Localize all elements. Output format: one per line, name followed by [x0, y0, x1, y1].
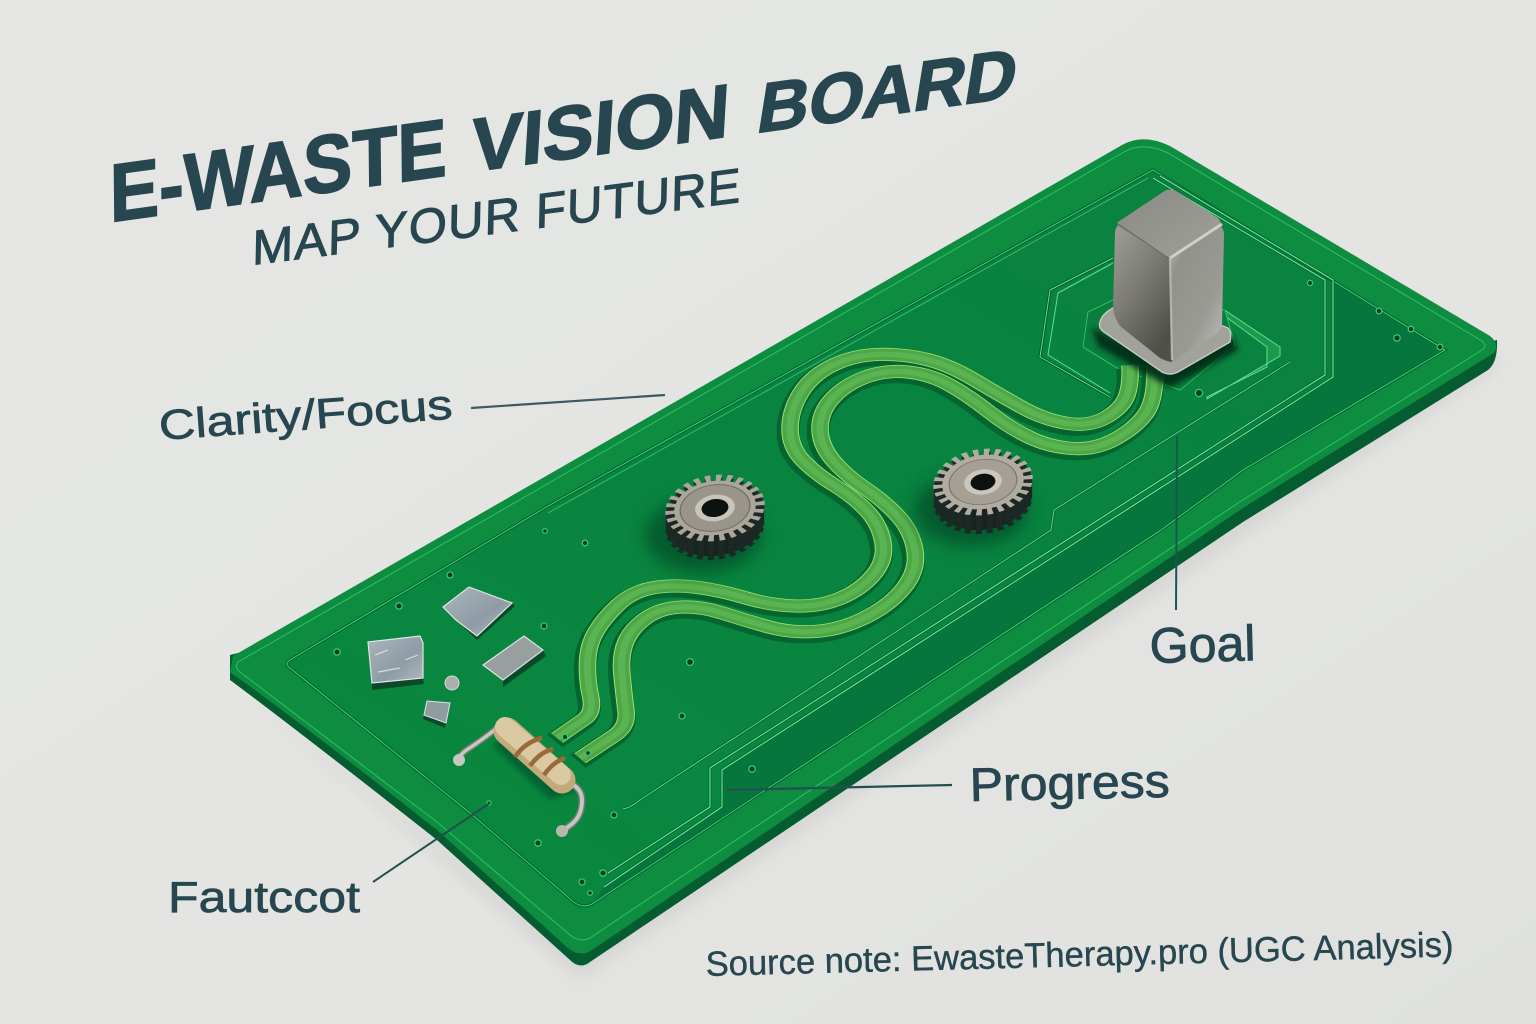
chip dot: [445, 676, 459, 690]
resistor leads: [458, 728, 497, 760]
title: BOARD: [752, 34, 1023, 149]
dark lower-right band: [592, 280, 1445, 904]
panel: circuit board: [230, 139, 1500, 980]
callout: Goal: Goal: [1149, 615, 1256, 674]
icon: gear left: [645, 473, 764, 573]
block left face: [1113, 224, 1172, 362]
title: [109, 34, 1023, 240]
goal pad: [1083, 300, 1235, 390]
title: VISION: [469, 69, 732, 189]
source note: Source note: EwasteTherapy.pro (UGC Analysis): [705, 925, 1454, 984]
icon: gear right: [914, 447, 1032, 546]
scrap metal chips: [368, 587, 546, 728]
board surface: [230, 139, 1496, 954]
S-curve path: two copper traces: [555, 354, 1155, 761]
block top face: [1117, 190, 1220, 258]
block shadow: [1092, 328, 1238, 388]
chip left: [372, 678, 424, 690]
circuit traces: [604, 176, 1333, 887]
title: E-WASTE: [109, 102, 447, 240]
goal component: metal block: [1092, 190, 1238, 388]
chip top: [443, 603, 515, 640]
rim highlight line: [236, 147, 1485, 940]
goal hexagon outline: [1040, 258, 1280, 399]
icon: resistor (start point): [453, 727, 582, 837]
inner outline trace: [287, 170, 1445, 906]
callout: Fautccot: [168, 803, 490, 922]
block right face: [1170, 226, 1224, 362]
block base: [1100, 308, 1231, 374]
callout: Clarity/Focus: Clarity/Focus: [157, 381, 454, 449]
resistor body: [507, 731, 562, 780]
board shadow: [240, 350, 1500, 980]
chip small: [423, 715, 446, 728]
callout: Clarity/Focus: [157, 381, 665, 449]
via holes: [334, 280, 1443, 895]
callout: Progress: Progress: [969, 754, 1170, 811]
inner field: [287, 170, 1445, 906]
chip right: [483, 650, 546, 687]
board edge: [230, 340, 1497, 966]
subtitle: MAP YOUR FUTURE: [252, 158, 741, 276]
callout: Fautccot: Fautccot: [168, 873, 360, 922]
resistor colour bands: [515, 738, 565, 775]
title block: [109, 34, 1023, 276]
callout: Progress: [727, 754, 1170, 811]
